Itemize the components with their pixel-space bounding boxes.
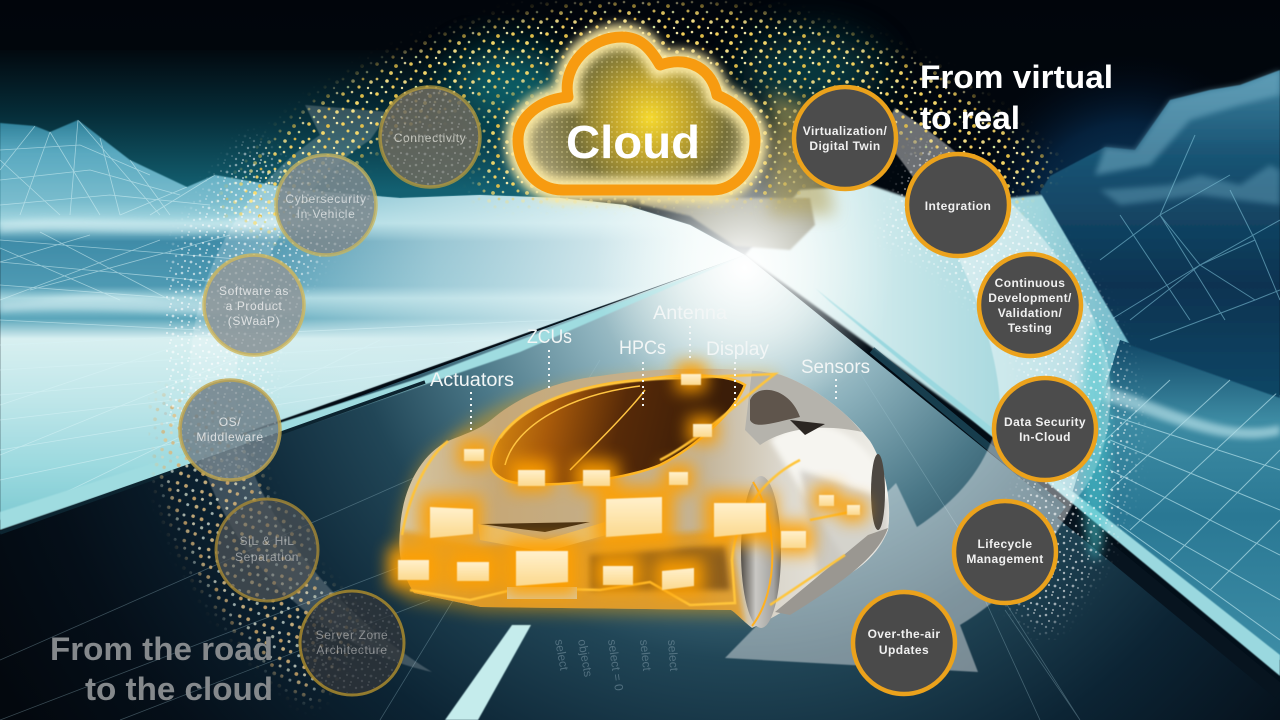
right terrain wireframe mountains	[640, 70, 1280, 660]
horizon glow	[560, 110, 940, 430]
code text on the road	[552, 638, 681, 692]
label: Sensors	[801, 357, 870, 402]
circle: Integration: Integration	[925, 199, 991, 213]
circle: Software as a Product	[204, 255, 304, 355]
cloud outline	[518, 37, 755, 190]
code text on the road: select = 0	[605, 638, 626, 692]
car glow	[395, 373, 780, 615]
circle: Server Zone Architecture	[300, 591, 404, 695]
circle: Virtualization: Virtualization/	[803, 124, 887, 138]
circle: OS Middleware	[180, 380, 280, 480]
component labels	[430, 303, 870, 432]
circle: Continuous Development: Validation/	[998, 306, 1062, 320]
circle: SiL and HiL Separation: Separation	[235, 550, 299, 564]
circle: Software as a Product: Software as	[219, 284, 289, 298]
car illustration	[388, 360, 900, 640]
label: Antenna	[653, 303, 727, 360]
code text on the road: select	[665, 639, 681, 672]
cloud halo	[518, 37, 755, 190]
cloud icon with label	[518, 37, 755, 190]
car body	[399, 368, 890, 628]
circle: Connectivity: Connectivity	[394, 131, 466, 145]
arrow: left translucent arc	[190, 105, 432, 672]
circle: Lifecycle Management	[954, 501, 1056, 603]
circle: Continuous Development	[979, 254, 1081, 356]
glowing circuit lines	[402, 374, 860, 605]
label: HPCs: HPCs	[619, 338, 666, 359]
label: Display	[706, 339, 769, 408]
circle: Data Security: In-Cloud	[1019, 430, 1071, 444]
arrow: right translucent arc	[725, 108, 1110, 672]
label: Actuators	[430, 370, 514, 432]
label: Antenna: Antenna	[653, 303, 727, 324]
cloud label: Cloud	[566, 116, 700, 168]
windshield	[491, 375, 745, 484]
code text on the road: select	[552, 638, 571, 672]
circle: Virtualization: Digital Twin	[809, 139, 881, 153]
heading: From the road to the cloud	[50, 631, 273, 707]
heading: From the road to the cloud: to the cloud	[85, 671, 273, 707]
front wheel	[741, 476, 781, 628]
circle: Over-the-air Updates: Over-the-air	[868, 627, 940, 641]
circle: Server Zone Architecture: Architecture	[316, 643, 388, 657]
circles: from the road to the cloud	[180, 87, 480, 695]
cloud interior	[518, 37, 755, 190]
circle: Data Security	[994, 378, 1096, 480]
label: HPCs	[619, 338, 666, 406]
circle: Cybersecurity	[276, 155, 376, 255]
circle: Over-the-air Updates	[853, 592, 955, 694]
circle: Lifecycle Management: Lifecycle	[978, 537, 1032, 551]
heading: From the road to the cloud: From the road	[50, 631, 273, 667]
lane marking	[445, 625, 531, 720]
circle: Data Security: Data Security	[1004, 415, 1086, 429]
circle: SiL and HiL Separation: SiL & HiL	[240, 534, 294, 548]
circle: Over-the-air Updates: Updates	[879, 643, 929, 657]
circle: Lifecycle Management: Management	[966, 552, 1044, 566]
circle: Server Zone Architecture: Server Zone	[316, 628, 388, 642]
circle: Integration	[907, 154, 1009, 256]
circle: OS Middleware: OS/	[219, 415, 241, 429]
road	[0, 255, 1280, 720]
registration plate	[507, 587, 577, 599]
code text on the road: objects	[575, 638, 595, 678]
circle: Cybersecurity: In-Vehicle	[297, 207, 355, 221]
circle: Cybersecurity: Cybersecurity	[285, 192, 367, 206]
circle: SiL and HiL Separation	[216, 499, 318, 601]
label: Sensors: Sensors	[801, 357, 870, 378]
circle: OS Middleware: Middleware	[196, 430, 264, 444]
electronic module boxes	[388, 362, 866, 596]
circle: Software as a Product: a Product	[226, 299, 282, 313]
heading: From virtual to real: From virtual	[920, 59, 1113, 95]
circle: Connectivity	[380, 87, 480, 187]
label: ZCUs: ZCUs	[527, 327, 572, 348]
label: Actuators: Actuators	[430, 370, 514, 391]
label: Display: Display	[706, 339, 769, 360]
circles: from virtual to real	[794, 87, 1096, 694]
rear lower panel	[775, 528, 888, 615]
circle: Continuous Development: Testing	[1008, 321, 1052, 335]
under-cloud mountain	[640, 198, 815, 250]
circle: Continuous Development: Development/	[988, 291, 1072, 305]
code text on the road: select	[637, 639, 654, 672]
rear wheel	[871, 454, 885, 530]
circle: Continuous Development: Continuous	[995, 276, 1065, 290]
circle: Software as a Product: (SWaaP)	[228, 314, 280, 328]
circle: Virtualization	[794, 87, 896, 189]
left terrain wireframe landscape	[0, 120, 750, 520]
heading: From virtual to real: to real	[920, 100, 1020, 136]
label: ZCUs	[527, 327, 572, 392]
heading: From virtual to real	[920, 59, 1113, 136]
